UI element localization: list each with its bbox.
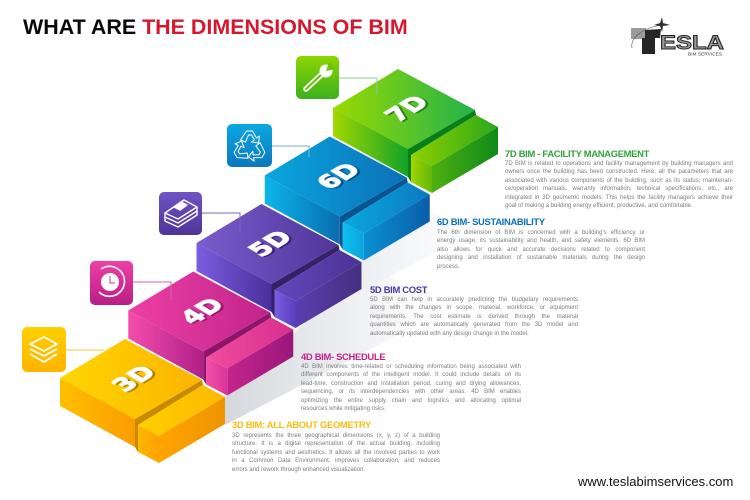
text block: 6D BIM: energy usage, its sustainability and health, and safety elements. 6D BIM	[437, 238, 645, 244]
text block: 4D BIM: lead-time, construction and installation period, curing and drying allowances,	[301, 381, 521, 387]
text block: 5D BIM: requirements. The cost estimate is derived through the material	[370, 314, 578, 320]
icon: wrench, 7D	[296, 56, 377, 99]
heading: 5D BIM: 5D BIM COST	[370, 284, 427, 295]
text block: 7D BIM: integrated in 3D geometric models. This helps the facility managers achieve their	[505, 195, 733, 201]
step: 3D block	[60, 339, 225, 463]
text block: 4D BIM: 4D BIM involves time-related or scheduling information being associated with	[301, 364, 521, 370]
step: 4D block: 4D	[173, 294, 231, 328]
heading: 6D BIM: 6D BIM- SUSTAINABILITY	[437, 216, 545, 227]
text block: 3D BIM: in a Common Data Environment, improves collaboration, and reduces	[232, 458, 440, 464]
text block: 5D BIM	[370, 284, 578, 337]
text block: 6D BIM: also allows for quick and accurate decisions related to component	[437, 247, 645, 253]
text block: 3D BIM: functional systems and aesthetics. It allows all the involved parties to work	[232, 450, 440, 456]
icon: banknotes, 5D	[159, 192, 240, 235]
step: 3D block: 3D	[105, 361, 162, 396]
icon: recycle, 6D	[227, 124, 309, 167]
text block: 4D BIM: different components of the intelligent model. It could include details on its	[301, 372, 521, 378]
heading: 3D BIM: 3D BIM: ALL ABOUT GEOMETRY	[232, 419, 371, 430]
logo: Tesla BIM Services	[631, 17, 724, 56]
text block: 5D BIM: automatically updated with any design change in the model.	[370, 331, 529, 337]
text block: 7D BIM	[505, 148, 733, 209]
step: 5D block	[196, 204, 362, 328]
text block: 5D BIM: along with the changes in scope, material, workforce, or equipment	[370, 305, 578, 311]
step: 7D block: 7D	[378, 91, 435, 126]
step: 5D block: 5D	[241, 226, 299, 261]
step: 6D block: 6D	[310, 159, 367, 193]
text block: 4D BIM	[301, 351, 521, 412]
text block: 6D BIM: The 6th dimension of BIM is concerned with a building's efficiency or	[437, 230, 645, 236]
step: 6D block	[265, 136, 430, 260]
text block: 7D BIM: associated with various components of the building, such as its status, maintenan-	[505, 178, 733, 184]
step: 4D block	[128, 272, 293, 396]
text block: 6D BIM: designing and installation of sustainable materials during the design	[437, 255, 645, 261]
text block: 3D BIM	[232, 419, 440, 473]
text block: 4D BIM: optimizing the entire supply chain and logistics and allocating optimal	[301, 398, 521, 404]
text block: 5D BIM: quantities which are automatically generated from the 3D model and	[370, 322, 578, 328]
text block: 6D BIM: process.	[437, 264, 460, 270]
text block: 6D BIM	[437, 216, 645, 270]
shadow behind the steps	[225, 205, 470, 425]
text block: 4D BIM: sequencing, or its interdependencies with other areas. 4D BIM enables	[301, 389, 521, 395]
text block: 7D BIM: goal of making a building energy efficient, productive, and comfortable.	[505, 203, 693, 209]
text block: 7D BIM: 7D BIM is related to operations and facility management by building managers and	[505, 161, 733, 167]
logo: Tesla BIM Services: BIM SERVICES	[688, 52, 722, 56]
website footer: www.teslabimservices.com	[578, 474, 733, 489]
heading: 7D BIM: 7D BIM - FACILITY MANAGEMENT	[505, 148, 649, 159]
text block: 5D BIM: 5D BIM can help in accurately predicting the budgetary requirements	[370, 297, 578, 303]
text block: 7D BIM: ce/operation manuals, warranty information, technical specifications, etc., are	[505, 186, 733, 192]
text block: 3D BIM: structure. It is a digital representation of the actual building, including	[232, 441, 440, 447]
text block: 3D BIM: errors and rework through enhanced visualization.	[232, 467, 365, 473]
text block: 3D BIM: 3D represents the three geographical dimensions (x, y, z) of a building	[232, 433, 440, 439]
heading: 4D BIM: 4D BIM- SCHEDULE	[301, 351, 385, 362]
icon: clock, 4D	[90, 261, 171, 305]
step: 7D block	[333, 69, 498, 193]
title: WHAT ARE THE DIMENSIONS OF BIM	[23, 15, 408, 39]
text block: 7D BIM: owners once the building has been constructed. Here, all the parameters that are	[505, 169, 733, 175]
text block: 4D BIM: resources while mitigating risks.	[301, 406, 386, 412]
logo: Tesla BIM Services: ESLA	[660, 33, 724, 54]
icon: layers, 3D	[22, 327, 104, 372]
